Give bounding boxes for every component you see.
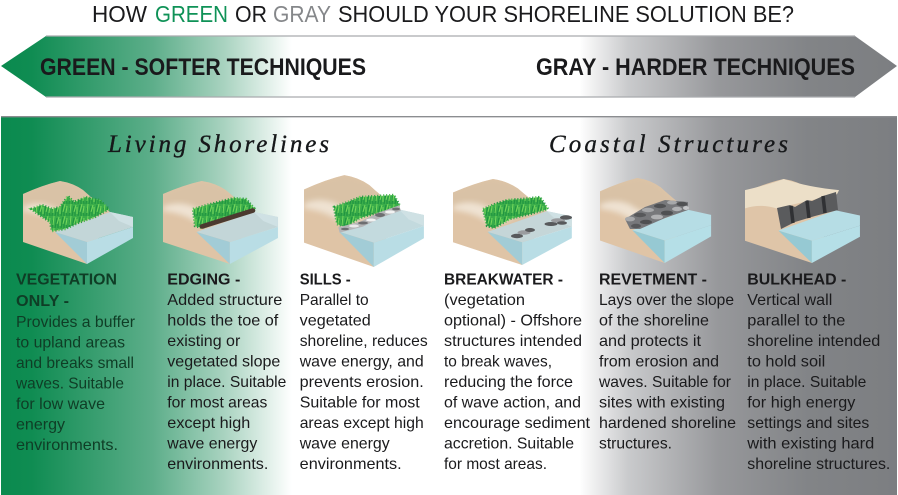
text: breakwater: encourage sediment xyxy=(444,415,591,432)
text: breakwater: for most areas. xyxy=(444,456,547,473)
text: sills xyxy=(299,271,428,473)
text: breakwater: to break waves, xyxy=(444,353,552,370)
text: bulkhead: shoreline intended xyxy=(747,333,880,350)
text: bulkhead: for high energy xyxy=(747,394,855,412)
text: sills: wave energy, and xyxy=(299,353,424,370)
text: bulkhead: with existing hard xyxy=(746,436,874,453)
panel: technique gradient background xyxy=(1,116,897,495)
illustration: bulkhead xyxy=(745,179,860,263)
text: bulkhead: to hold soil xyxy=(747,353,825,370)
text: bulkhead: in place. Suitable xyxy=(747,374,866,391)
illustration: vegetation only xyxy=(20,181,133,264)
text: edging: holds the toe of xyxy=(167,312,279,329)
illustration: breakwater xyxy=(450,179,572,265)
banner label: gray: GRAY - HARDER TECHNIQUES xyxy=(536,54,855,81)
text: bulkhead: BULKHEAD - xyxy=(747,271,846,288)
text: sills: shoreline, reduces xyxy=(300,333,428,350)
text: revetment xyxy=(598,271,736,453)
title: GRAY xyxy=(273,1,331,27)
text: vegetation only: environments. xyxy=(16,437,118,454)
text: sills: Parallel to xyxy=(300,292,369,309)
heading: Coastal Structures: Coastal Structures xyxy=(549,131,788,158)
title: GREEN xyxy=(155,1,228,27)
text: vegetation only: waves. Suitable xyxy=(15,376,124,393)
text: revetment: Lays over the slope xyxy=(599,292,734,309)
text: vegetation only: for low wave xyxy=(16,396,105,413)
text: vegetation only: and breaks small xyxy=(16,355,134,372)
text: edging: environments. xyxy=(167,456,268,473)
text: revetment: and protects it xyxy=(599,333,702,350)
text: edging: wave energy xyxy=(166,436,257,453)
text: revetment: structures. xyxy=(599,436,672,453)
title xyxy=(92,1,794,27)
title: HOW xyxy=(92,1,147,27)
text: breakwater: BREAKWATER - xyxy=(444,271,563,288)
text: revetment: waves. Suitable for xyxy=(598,374,732,391)
illustration: revetment xyxy=(597,178,711,263)
illustration: sills xyxy=(301,175,424,267)
text: revetment: sites with existing xyxy=(599,394,725,412)
text: edging: except high xyxy=(167,415,250,432)
text: breakwater: accretion. Suitable xyxy=(444,436,574,453)
text: sills: Suitable for most xyxy=(300,394,420,412)
text: edging: in place. Suitable xyxy=(167,374,286,391)
text: revetment: of the shoreline xyxy=(599,312,709,329)
text: vegetation only: VEGETATION xyxy=(16,271,117,288)
text: revetment: hardened shoreline xyxy=(599,415,736,432)
banner label: green: GREEN - SOFTER TECHNIQUES xyxy=(40,54,366,81)
text: sills: SILLS - xyxy=(300,271,351,288)
text: sills: environments. xyxy=(300,456,402,473)
text: bulkhead: Vertical wall xyxy=(747,292,832,309)
illustration: edging xyxy=(160,181,278,264)
heading: Living Shorelines: Living Shorelines xyxy=(107,131,329,158)
text: edging: existing or xyxy=(167,333,241,350)
text: vegetation only: to upland areas xyxy=(16,335,125,352)
title: OR xyxy=(235,1,267,27)
text: bulkhead xyxy=(746,271,890,473)
text: bulkhead: shoreline structures. xyxy=(747,456,890,473)
double arrow banner xyxy=(1,36,897,97)
text: sills: prevents erosion. xyxy=(300,374,424,391)
text: revetment: REVETMENT - xyxy=(599,271,707,288)
text: edging: for most areas xyxy=(167,394,267,412)
text: sills: areas except high xyxy=(300,415,424,432)
text: breakwater: structures intended xyxy=(444,333,582,350)
text: sills: wave energy xyxy=(299,436,390,453)
text: vegetation only: energy xyxy=(16,416,65,434)
text: edging: vegetated slope xyxy=(167,353,280,370)
text: vegetation only: Provides a buffer xyxy=(16,314,136,331)
text: bulkhead: parallel to the xyxy=(747,312,845,329)
text: bulkhead: settings and sites xyxy=(747,415,869,432)
text: edging: EDGING - xyxy=(167,271,240,288)
text: breakwater xyxy=(444,271,591,473)
text: breakwater: (vegetation xyxy=(444,292,525,309)
text: breakwater: optional) - Offshore xyxy=(444,312,582,329)
text: breakwater: reducing the force xyxy=(444,374,573,391)
text: edging xyxy=(166,271,286,473)
text: breakwater: of wave action, and xyxy=(444,394,581,412)
text: revetment: from erosion and xyxy=(599,353,719,370)
title: SHOULD YOUR SHORELINE SOLUTION BE? xyxy=(338,1,794,27)
text: vegetation only: ONLY - xyxy=(16,293,69,310)
text: vegetation only xyxy=(15,271,136,454)
text: sills: vegetated xyxy=(300,312,371,329)
text: edging: Added structure xyxy=(167,292,282,309)
